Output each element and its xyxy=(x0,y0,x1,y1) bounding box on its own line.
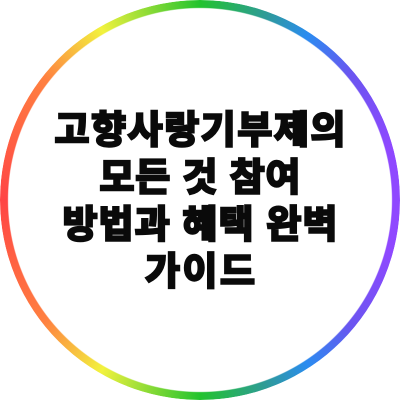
title: 가이드 xyxy=(145,252,255,294)
title: 방법과 혜택 완벽 xyxy=(62,204,338,246)
title: 고향사랑기부제의 xyxy=(54,110,346,152)
title: 모든 것 참여 xyxy=(100,158,300,200)
